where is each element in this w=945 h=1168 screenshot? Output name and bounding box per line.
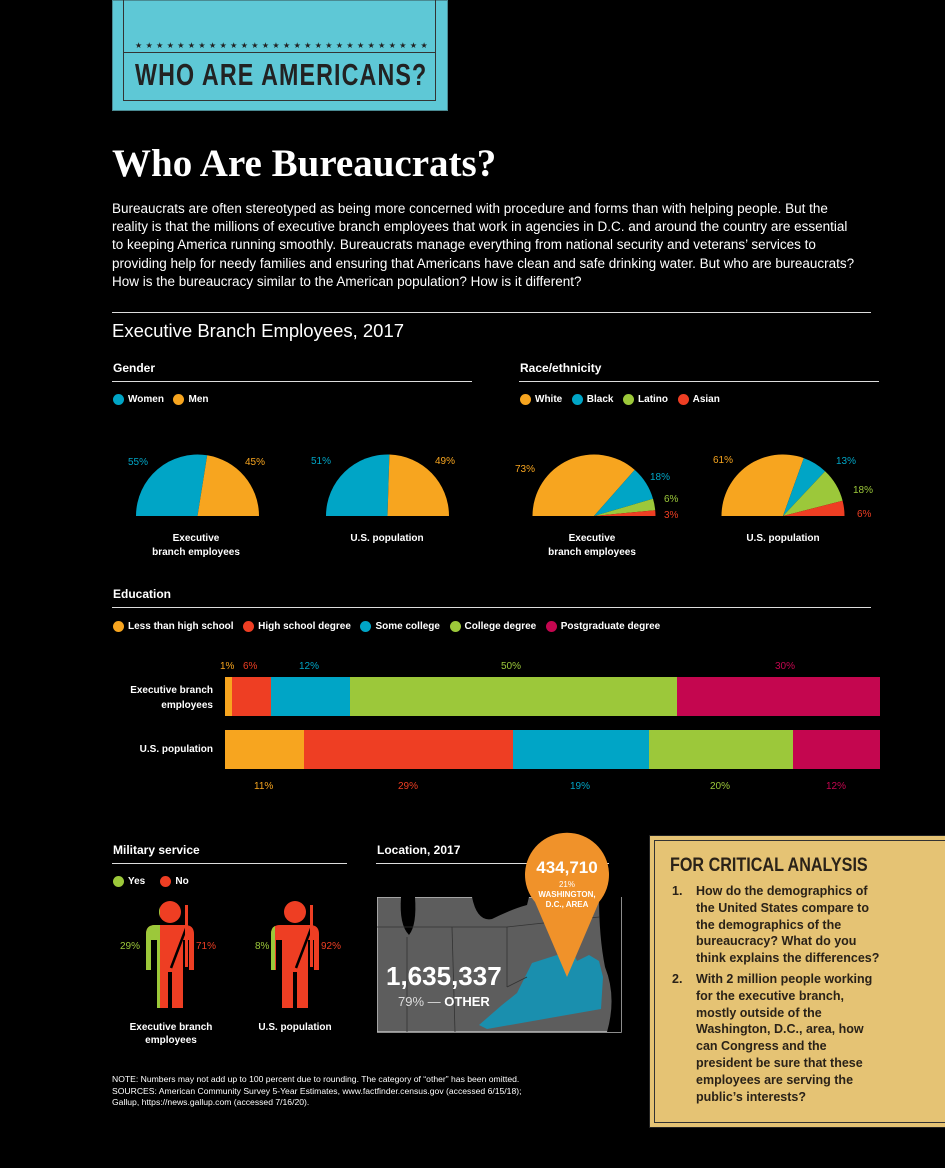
panel: education: Education bbox=[113, 587, 171, 601]
panel: military service bbox=[112, 843, 347, 887]
map bbox=[377, 897, 622, 1033]
chart: education bars: 1% bbox=[220, 661, 235, 672]
note and sources: Gallup, https://news.gallup.com (accessed 7/16/20). bbox=[112, 1097, 309, 1107]
chart: pies: U.S. population bbox=[746, 533, 820, 544]
chart: military figures: 29% bbox=[120, 941, 140, 952]
chart: pies: U.S. population bbox=[350, 533, 424, 544]
chart: education bars: U.S. population bbox=[140, 744, 213, 755]
panel: location map: 79% — OTHER bbox=[398, 994, 490, 1009]
chart: education bars bbox=[130, 661, 880, 792]
chart: education bars: 30% bbox=[775, 661, 795, 672]
panel: gender: Women Men bbox=[128, 394, 208, 405]
chart: education bars: 20% bbox=[710, 781, 730, 792]
chart: pies: 18% bbox=[650, 472, 670, 483]
callout: DC pin: 434,710 bbox=[536, 858, 598, 877]
chart: pies: 6% bbox=[857, 509, 872, 520]
note and sources bbox=[112, 1074, 522, 1107]
panel: for critical analysis: How do the demographics of the United States compare to the demographics of the bureaucracy? What do you think explains the differences? bbox=[696, 884, 879, 965]
panel: for critical analysis: FOR CRITICAL ANALYSIS bbox=[670, 855, 868, 876]
chart: military figures: 92% bbox=[321, 941, 341, 952]
panel: for critical analysis bbox=[649, 835, 945, 1128]
stat: other: 1,635,337 bbox=[386, 961, 502, 991]
panel: for critical analysis: 2. bbox=[672, 972, 682, 986]
panel: location map: Location, 2017 bbox=[377, 843, 460, 857]
panel: race/ethnicity: White Black Latino Asian bbox=[535, 394, 720, 405]
chart: education bars: 50% bbox=[501, 661, 521, 672]
chart: military figures: 71% bbox=[196, 941, 216, 952]
chart: education bars: 29% bbox=[398, 781, 418, 792]
section heading: Executive Branch Employees, 2017 bbox=[112, 320, 404, 341]
panel: gender bbox=[112, 361, 472, 405]
panel: location map bbox=[376, 843, 622, 1033]
chart: pies: 61% bbox=[713, 455, 733, 466]
chart: education bars: 12% bbox=[826, 781, 846, 792]
chart: military figures: Executive branch bbox=[130, 1022, 212, 1033]
chart: military figures: 8% bbox=[255, 941, 270, 952]
panel: gender: Gender bbox=[113, 361, 155, 375]
panel: race/ethnicity bbox=[519, 361, 879, 405]
chart: military figures: U.S. population bbox=[258, 1022, 332, 1033]
callout: DC pin: 21% bbox=[559, 880, 575, 889]
chart: pies: 49% bbox=[435, 456, 455, 467]
note and sources: SOURCES: American Community Survey 5-Year Estimates, www.factfinder.census.gov (accessed 6/15/18); bbox=[112, 1086, 522, 1096]
chart: pies: Executive bbox=[569, 533, 616, 544]
panel: education: Less than high school High school degree Some college College degree Postgraduate degree bbox=[128, 621, 660, 632]
chart: pies: 13% bbox=[836, 456, 856, 467]
panel: education bbox=[112, 587, 871, 632]
header banner: who are americans bbox=[112, 0, 448, 111]
chart: education bars: 11% bbox=[254, 781, 273, 792]
chart: pies: 51% bbox=[311, 456, 331, 467]
chart: pies: branch employees bbox=[548, 547, 636, 558]
chart: pies: 45% bbox=[245, 457, 265, 468]
callout: DC pin: WASHINGTON, bbox=[538, 890, 596, 899]
chart: military figures bbox=[120, 901, 341, 1046]
chart: pies: 73% bbox=[515, 464, 535, 475]
chart: pies: 55% bbox=[128, 457, 148, 468]
chart: pies bbox=[128, 454, 873, 558]
banner heading: WHO ARE AMERICANS? bbox=[135, 57, 427, 92]
panel: for critical analysis: With 2 million people working for the executive branch, mostly outside of the Washington, D.C., area, how can Congress and the president be sure that these employees are serving the public’s interests? bbox=[696, 972, 872, 1104]
callout: DC pin bbox=[525, 832, 609, 977]
chart: education bars: 19% bbox=[570, 781, 590, 792]
chart: pies: 18% bbox=[853, 485, 873, 496]
title: Who Are Bureaucrats? bbox=[112, 142, 496, 185]
chart: education bars: 12% bbox=[299, 661, 319, 672]
chart: pies: 3% bbox=[664, 510, 679, 521]
chart: pies: 6% bbox=[664, 494, 679, 505]
note and sources: NOTE: Numbers may not add up to 100 percent due to rounding. The category of “other” has been omitted. bbox=[112, 1074, 519, 1084]
callout: DC pin: D.C., AREA bbox=[546, 900, 589, 909]
intro text: Bureaucrats are often stereotyped as being more concerned with procedure and forms than with helping people. But the reality is that the millions of executive branch employees that work in agencies in D.C. and around the country are essential to keeping America running smoothly. Bureaucrats manage everything from national security and veterans’ services to providing help for needy families and ensuring that Americans have clean and safe drinking water. But who are bureaucrats? How is the bureaucracy similar to the American population? How is it different? bbox=[112, 201, 854, 289]
chart: pies: Executive bbox=[173, 533, 220, 544]
panel: military service: Yes No bbox=[128, 876, 189, 887]
chart: pies: branch employees bbox=[152, 547, 240, 558]
chart: education bars: Executive branch bbox=[130, 685, 213, 696]
panel: for critical analysis: 1. bbox=[672, 884, 682, 898]
panel: race/ethnicity: Race/ethnicity bbox=[520, 361, 601, 375]
chart: military figures: employees bbox=[145, 1035, 197, 1046]
chart: education bars: 6% bbox=[243, 661, 258, 672]
panel: military service: Military service bbox=[113, 843, 200, 857]
chart: education bars: employees bbox=[161, 700, 213, 711]
